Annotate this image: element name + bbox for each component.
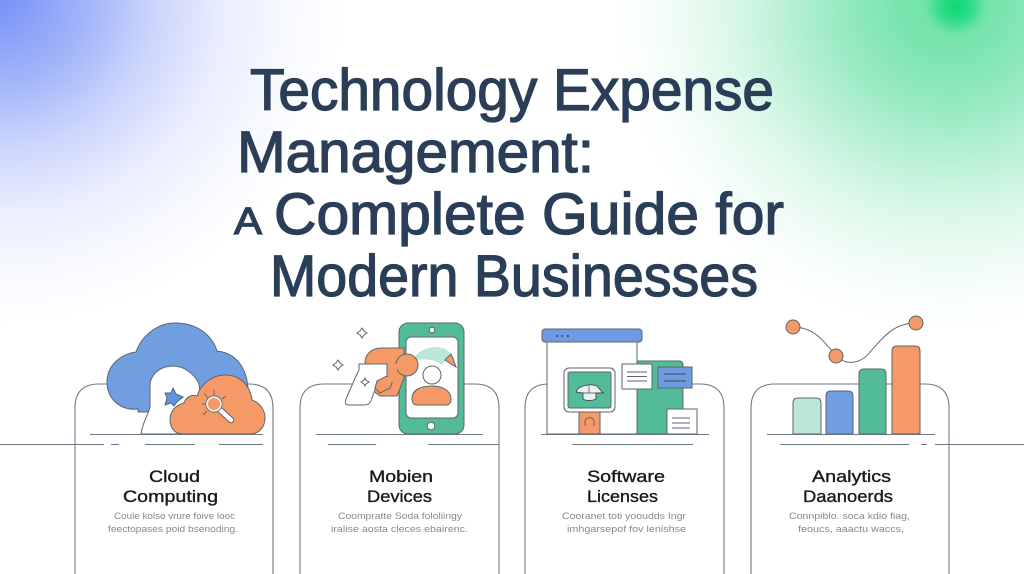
panel: software licenses — [525, 329, 724, 574]
heading: cloud computing: Cloud — [149, 467, 200, 486]
card outline — [300, 384, 499, 574]
description: cloud computing — [108, 511, 238, 535]
icon: smartphone with hand — [333, 323, 464, 434]
description: software licenses: Cooranet toti yooudds Ingr — [562, 511, 686, 522]
heading: software licenses: Software — [587, 467, 665, 486]
icon: clouds — [107, 323, 265, 434]
heading: analytics dashboards: Daanoerds — [803, 487, 893, 506]
description: software licenses: imhgarsepof fov lenishse — [567, 524, 686, 535]
heading: analytics dashboards: Analytics — [812, 467, 891, 486]
description: mobile devices — [331, 511, 468, 535]
heading: cloud computing: Computing — [123, 487, 218, 506]
heading: mobile devices — [367, 467, 433, 506]
card outline — [75, 384, 273, 574]
title: Technology Expense — [250, 58, 774, 123]
title: A — [234, 201, 263, 243]
heading: cloud computing — [123, 467, 218, 506]
icon: sparkles — [333, 328, 369, 386]
heading: mobile devices: Devices — [367, 487, 432, 506]
title: Complete Guide for — [274, 182, 784, 247]
description: analytics dashboards: feoucs, aaactu waccs, — [798, 524, 904, 535]
horizontal baseline rule segments — [0, 434, 1024, 444]
description: mobile devices: Coompratte Soda fololiingy — [338, 511, 462, 522]
description: software licenses — [562, 511, 686, 535]
panel: cloud computing — [75, 323, 273, 574]
title: Management: — [237, 120, 594, 185]
heading: analytics dashboards — [803, 467, 893, 506]
description: analytics dashboards — [789, 511, 910, 535]
panel: mobile devices — [300, 323, 499, 574]
title: Modern Businesses — [270, 244, 758, 309]
card outline — [525, 384, 724, 574]
icon: software windows — [542, 329, 697, 434]
heading: software licenses — [587, 467, 665, 506]
description: mobile devices: iralise aosta cleces ebairenc. — [331, 524, 468, 535]
description: cloud computing: feectopases poid bsenoding. — [108, 524, 238, 535]
description: cloud computing: Coule kolso vrure foive looc — [114, 511, 235, 522]
heading: mobile devices: Mobien — [369, 467, 433, 486]
line chart — [786, 316, 923, 363]
panel: analytics dashboards — [751, 316, 949, 574]
title — [234, 58, 784, 309]
bar chart — [793, 346, 920, 434]
description: analytics dashboards: Connpiblo. soca kdio fiag, — [789, 511, 910, 522]
heading: software licenses: Licenses — [587, 487, 658, 506]
card outline — [751, 384, 949, 574]
